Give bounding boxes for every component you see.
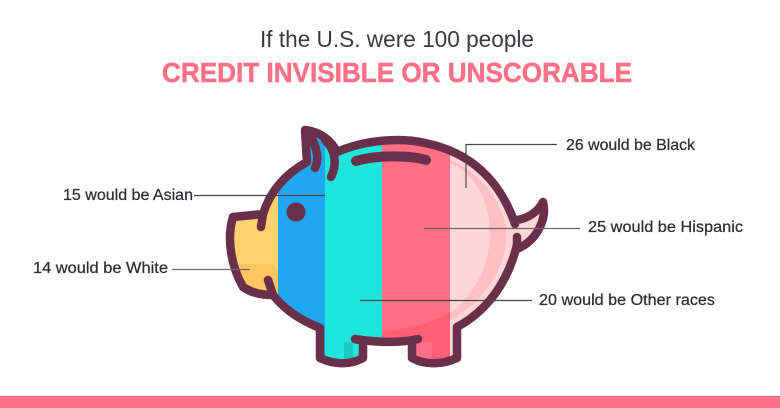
callout: Other races: 20 would be Other races <box>539 292 715 309</box>
subtitle: CREDIT INVISIBLE OR UNSCORABLE <box>162 57 632 88</box>
title: If the U.S. were 100 people <box>260 26 534 52</box>
callout: Hispanic: 25 would be Hispanic <box>588 219 743 236</box>
callout: Black: 26 would be Black <box>566 137 695 154</box>
callout: Black <box>466 137 695 188</box>
coin slot <box>356 156 426 161</box>
snout <box>230 214 273 295</box>
callout: Asian: 15 would be Asian <box>63 187 193 204</box>
back <box>263 130 515 224</box>
belly and legs <box>273 295 418 363</box>
eye <box>286 202 306 222</box>
tail <box>516 202 544 249</box>
callout: White: 14 would be White <box>33 260 168 277</box>
piggy bank chart <box>226 126 548 368</box>
ear <box>311 137 317 168</box>
footer bar <box>0 396 780 408</box>
outline <box>230 130 544 363</box>
colored bands <box>234 137 540 360</box>
